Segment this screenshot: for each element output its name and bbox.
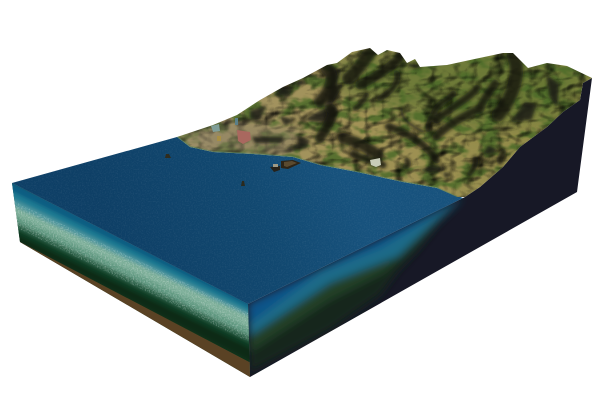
ridge shadows, western slopes (250, 65, 559, 178)
vegetation patches (178, 50, 588, 191)
yellow shed (217, 136, 221, 141)
buoy near the harbour (241, 181, 245, 186)
rocky coastal plain (177, 122, 300, 157)
valley shadows, central range (320, 50, 516, 173)
water surface (12, 137, 463, 304)
buoy offshore (165, 154, 171, 158)
sea floor cross-section (248, 198, 463, 372)
hillshade relief (180, 50, 587, 197)
pink building (237, 130, 251, 144)
boat (270, 164, 280, 172)
terrain block diagram (12, 48, 592, 377)
teal building (211, 124, 220, 132)
coastal fringe (177, 137, 457, 197)
left cross-section face (12, 183, 250, 377)
harbour pier (281, 160, 301, 169)
green wash on the upper slopes (330, 50, 595, 130)
blue tower (235, 118, 238, 125)
right cliff face (240, 70, 600, 380)
white warehouse (370, 158, 381, 167)
buildings (211, 118, 381, 167)
water and sediment bands (5, 178, 255, 364)
mountain terrain (177, 48, 592, 197)
